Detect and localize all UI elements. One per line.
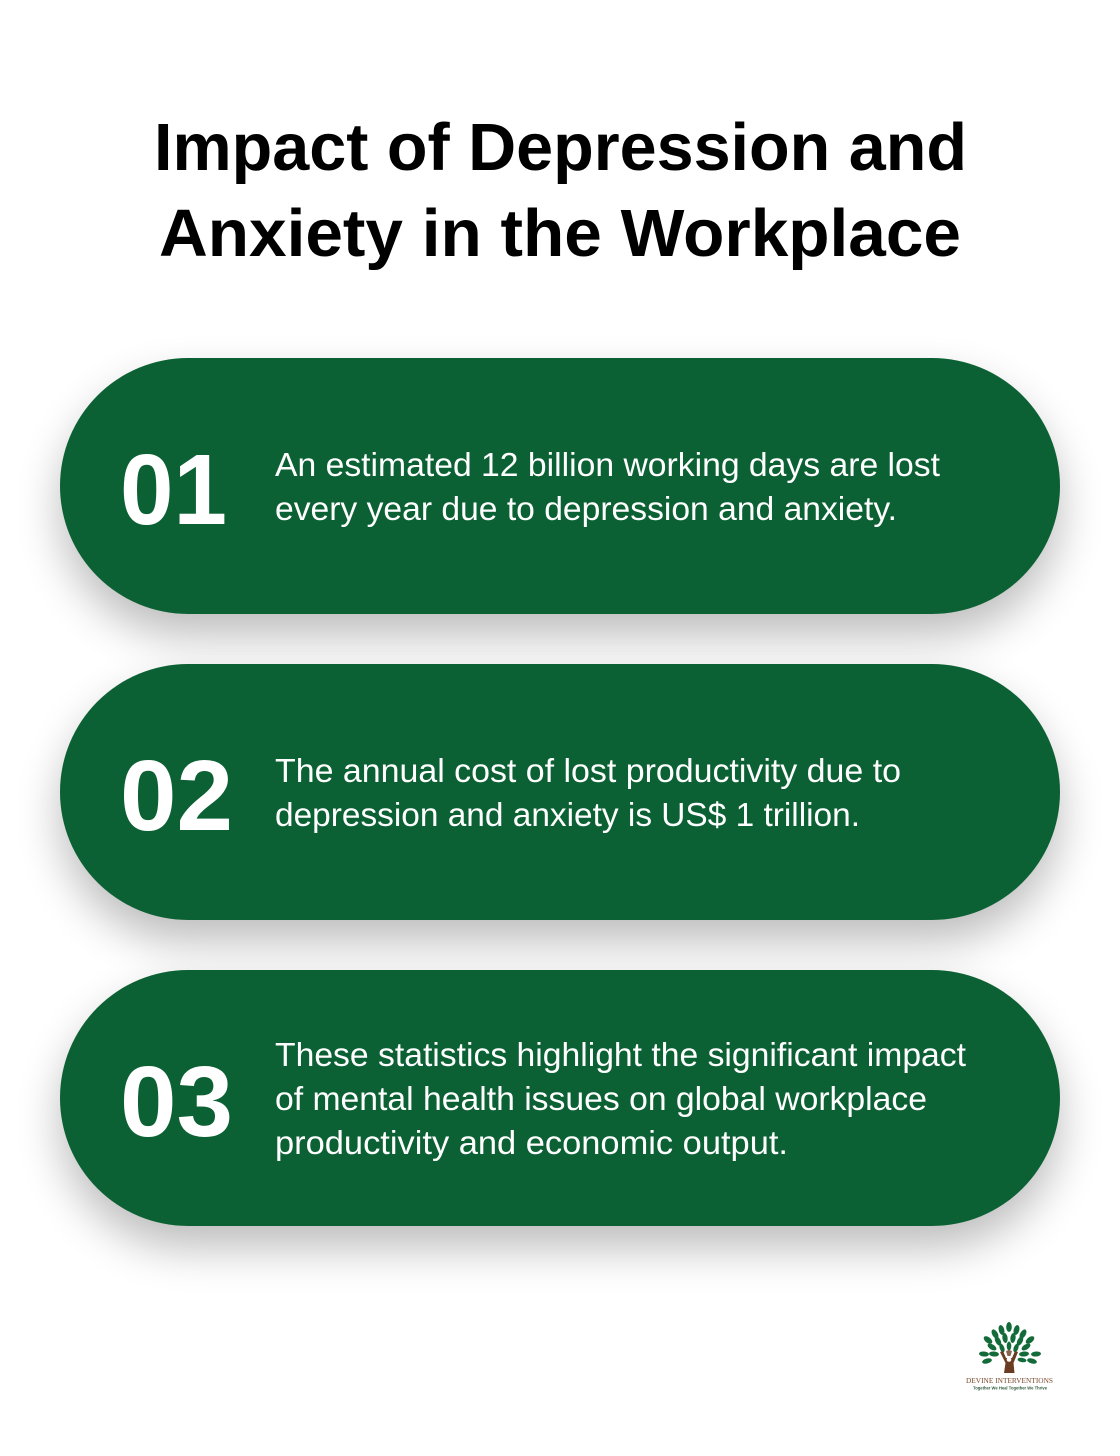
logo name: DEVINE INTERVENTIONS <box>966 1377 1053 1385</box>
text: significance: These statistics highlight the significant impact <box>275 1036 966 1073</box>
text: annual cost: depression and anxiety is US$ 1 trillion. <box>275 796 860 833</box>
text: significance: productivity and economic output. <box>275 1124 788 1161</box>
number 02: 02 <box>120 740 233 852</box>
number 03: 03 <box>120 1046 233 1158</box>
title: Anxiety in the Workplace <box>159 196 961 271</box>
text: annual cost <box>275 752 901 833</box>
panel: statistic 01 <box>60 358 1060 636</box>
text: working days lost <box>275 446 940 527</box>
panel: statistic 03 <box>60 970 1060 1248</box>
text: working days lost: An estimated 12 billion working days are lost <box>275 446 940 483</box>
panel: statistic 02 <box>60 664 1060 942</box>
text: annual cost: The annual cost of lost productivity due to <box>275 752 901 789</box>
text: significance: of mental health issues on global workplace <box>275 1080 927 1117</box>
logo tagline: Together We Heal Together We Thrive <box>973 1386 1047 1390</box>
title: Impact of Depression and <box>154 110 967 185</box>
logo head <box>1007 1357 1011 1362</box>
text: working days lost: every year due to depression and anxiety. <box>275 490 897 527</box>
icon: Devine Interventions logo <box>966 1322 1053 1390</box>
number 01: 01 <box>120 434 227 546</box>
text: significance <box>275 1036 966 1161</box>
title <box>154 110 967 271</box>
